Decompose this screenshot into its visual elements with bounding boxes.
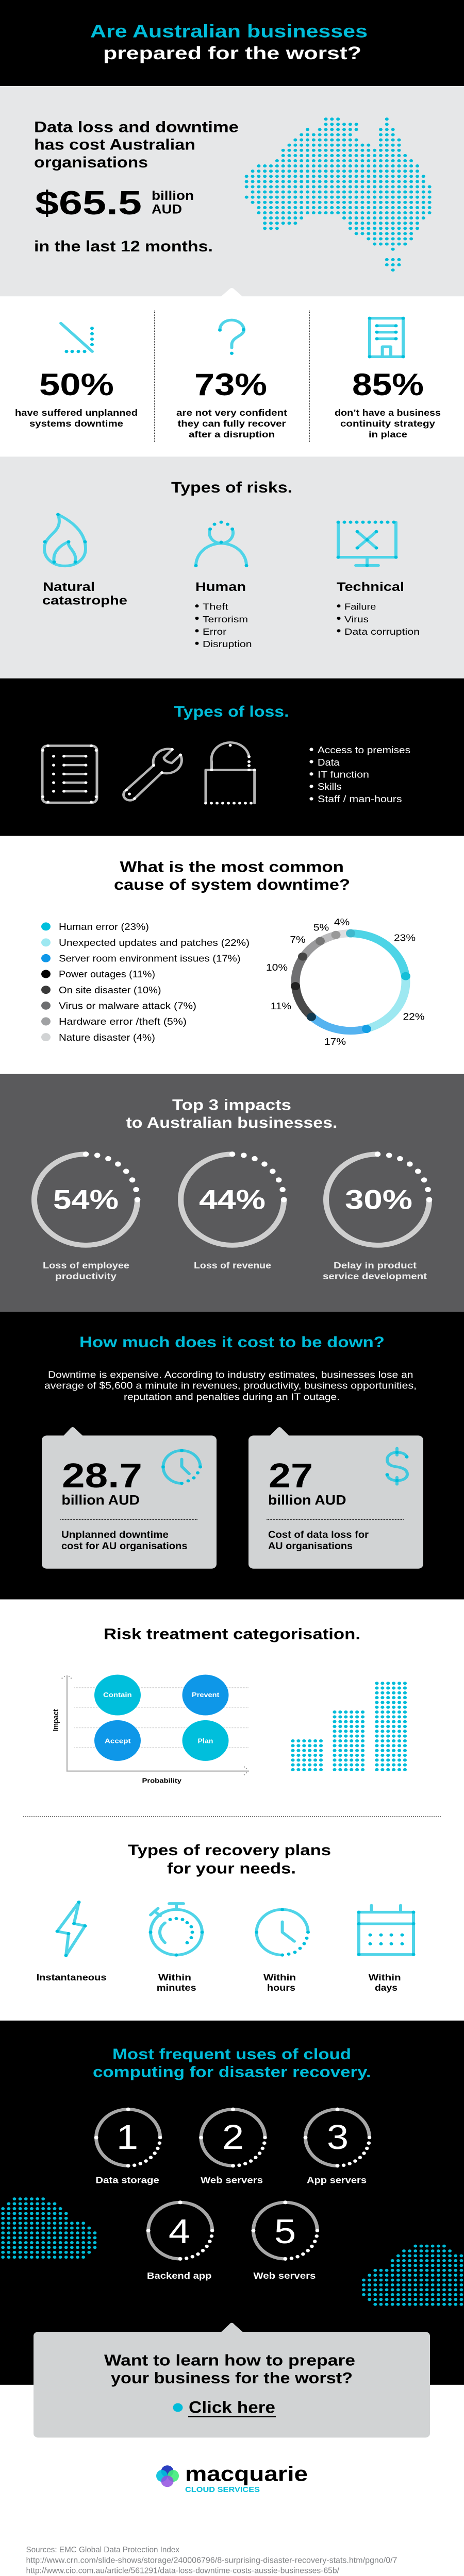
title: prepared for the worst? [103,43,361,63]
sources [26,2545,397,2575]
donut value labels: 10% [266,962,288,973]
panel: types of loss [0,679,464,836]
heading: recovery plans [128,1841,331,1877]
big number: $65.5 billion AUD: billion [152,188,194,203]
heading [126,1096,337,1131]
risk: natural catastrophe: Natural [43,580,95,594]
list: what is lost [309,745,410,805]
heading: Risk treatment categorisation. [104,1625,360,1642]
icon: monitor with cross [338,522,396,566]
intro text: organisations [34,154,148,171]
intro text [34,118,239,171]
sources: http://www.crn.com/slide-shows/storage/240006796/8-surprising-disaster-recovery-stats.htm/pgno/0/7 [26,2555,397,2565]
ring: 54% loss of employee productivity: Loss of employee [43,1260,129,1270]
panel: headline cost [0,86,464,296]
card: 27 billion AUD: 27 [269,1456,313,1495]
big number: $65.5 billion AUD [35,184,194,222]
heading: recovery plans: for your needs. [167,1859,296,1877]
sources: http://www.cio.com.au/article/561291/data-loss-downtime-costs-aussie-businesses-65b/ [26,2566,339,2575]
risk matrix chart: Accept [105,1737,131,1744]
legend: Power outages (11%) [59,969,155,980]
heading: computing for disaster recovery. [93,2063,371,2080]
risk matrix chart: Impact [51,1709,60,1731]
stat: 73%: after a disruption [189,429,275,439]
risk: human: Error [203,626,226,637]
heading: Top 3 impacts [172,1096,291,1113]
use 5: web servers: Web servers [253,2270,316,2281]
plan: within days: Within [369,1972,401,1982]
legend: Virus or malware attack (7%) [59,1001,196,1011]
icon: question mark [220,320,244,353]
logo: macquarie cloud services: macquarie [185,2463,308,2486]
use 4: backend app: Backend app [147,2270,211,2281]
panel: cloud uses [0,2021,464,2385]
list: what is lost: IT function [318,769,369,780]
stat: 85%: in place [369,429,407,439]
big number: $65.5 billion AUD: AUD [152,202,182,216]
list: what is lost: Access to premises [318,745,410,756]
plan: within minutes [151,1904,202,1993]
stat: 50%: 50% [39,367,114,402]
use 2: web servers: 2 [222,2118,244,2157]
ring: 54% loss of employee productivity: 54% [53,1184,119,1215]
risk: human: Terrorism [203,614,248,624]
risk: human: Human [195,580,246,594]
dotted bar chart [293,1683,405,1770]
title [90,21,368,63]
stat: 73%: 73% [194,367,267,402]
ring: 54% loss of employee productivity [34,1154,140,1281]
ring: 30% delay in product service development: 30% [345,1184,412,1215]
risk: technical: Data corruption [344,626,420,637]
donut value labels: 4% [334,917,350,928]
icon: downward trend arrow [61,323,92,351]
heading: What is the most common [120,858,344,875]
stat: 85%: don’t have a business [335,408,441,418]
stat: 85% [335,367,441,439]
risk matrix chart: Plan [198,1737,213,1744]
legend: Human error (23%) [59,922,149,933]
legend: Hardware error /theft (5%) [59,1016,187,1027]
use 5: web servers [251,2200,317,2281]
donut value labels: 7% [290,935,306,945]
list: what is lost: Data [318,757,340,768]
legend: On site disaster (10%) [59,985,161,995]
donut value labels: 23% [394,933,416,943]
heading [114,858,350,893]
risk: human: Theft [203,602,228,612]
panel: key statistics [0,288,464,456]
risk matrix chart: Contain [103,1691,132,1699]
risk: natural catastrophe: catastrophe [42,594,127,607]
list: what is lost: Staff / man-hours [318,794,402,805]
plan: within hours [257,1909,308,1993]
donut value labels: 5% [313,922,329,933]
ring: 44% loss of revenue: Loss of revenue [194,1260,271,1270]
panel: causes of downtime [0,836,464,1074]
use 4: backend app [146,2200,212,2281]
panel: cost of downtime [0,1312,464,1599]
legend [41,922,250,1043]
stat: 73%: are not very confident [176,408,288,418]
risk matrix chart: Prevent [192,1691,220,1699]
dotted map of Australia [246,119,429,270]
panel: types of risks [0,456,464,679]
paragraph [44,1370,417,1402]
donut value labels: 17% [324,1037,346,1047]
intro text: has cost Australian [34,136,195,153]
plan: instantaneous [37,1902,107,1982]
stat: 50% [15,367,138,429]
card: 27 billion AUD: Cost of data loss for [268,1529,369,1540]
logo: macquarie cloud services [156,2463,308,2494]
use 3: app servers: App servers [307,2175,367,2185]
risk matrix chart [51,1675,249,1784]
icon: flame [44,515,86,566]
panel: header [0,0,464,86]
donut value labels: 22% [403,1012,424,1022]
icon: person [196,522,246,566]
card: 27 billion AUD [248,1427,423,1569]
closing text: in the last 12 months. [34,238,213,255]
card: 28.7 billion AUD: 28.7 [62,1456,142,1495]
heading [93,2045,371,2080]
panel: top 3 impacts [0,1074,464,1312]
list: what is lost: Skills [318,782,342,792]
dotted cloud left [3,2199,95,2257]
risk: technical: Technical [337,580,404,594]
donut value labels [266,917,424,1047]
dotted cloud right [364,2246,461,2304]
use 2: web servers [199,2108,265,2185]
card: 28.7 billion AUD: cost for AU organisations [61,1540,188,1552]
stat: 50%: have suffered unplanned [15,408,138,418]
plan: instantaneous: Instantaneous [37,1972,107,1982]
ring: 44% loss of revenue [181,1154,287,1270]
risk: technical [337,580,420,637]
use 4: backend app: 4 [169,2212,190,2251]
call to action heading: Want to learn how to prepare [104,2351,355,2369]
stat: 73%: they can fully recover [178,418,286,429]
logo: macquarie cloud services: CLOUD SERVICES [185,2485,260,2494]
risk matrix chart: Probability [142,1776,181,1784]
donut chart [291,929,410,1033]
use 1: data storage: 1 [117,2118,138,2157]
risk: natural catastrophe [42,580,127,607]
icon: office building [370,318,403,357]
stat: 50%: systems downtime [29,418,123,429]
ring: 30% delay in product service development: Delay in product [334,1260,417,1270]
paragraph: average of $5,600 a minute in revenues, productivity, business opportunities, [44,1381,417,1391]
card: 27 billion AUD: billion AUD [268,1492,346,1507]
panel: call to action [34,2323,430,2437]
icon: clock [163,1450,201,1483]
click here link: Click here [189,2398,275,2417]
use 1: data storage: Data storage [95,2175,159,2185]
heading: cause of system downtime? [114,876,350,893]
plan: within days: days [375,1982,397,1993]
card: 28.7 billion AUD: Unplanned downtime [61,1529,169,1540]
heading: Types of loss. [174,703,289,720]
ring: 54% loss of employee productivity: productivity [55,1271,117,1281]
legend: Unexpected updates and patches (22%) [59,938,250,948]
title: Are Australian businesses [90,21,368,41]
ring: 44% loss of revenue: 44% [199,1184,266,1215]
heading: Most frequent uses of cloud [112,2045,351,2063]
use 5: web servers: 5 [274,2212,296,2251]
icon: wrench [124,749,181,800]
legend: Server room environment issues (17%) [59,954,241,964]
plan: within hours: Within [263,1972,296,1982]
stat: 85%: 85% [352,367,424,402]
intro text: Data loss and downtime [34,118,239,135]
heading: Types of risks. [171,479,292,496]
ring: 30% delay in product service development [323,1154,432,1281]
use 2: web servers: Web servers [201,2175,263,2185]
paragraph: reputation and penalties during an IT outage. [124,1392,340,1402]
plan: within minutes: Within [158,1972,191,1982]
call to action heading [104,2351,355,2387]
use 1: data storage [94,2108,160,2185]
plan: within hours: hours [267,1982,295,1993]
risk: technical: Failure [344,602,376,612]
donut value labels: 11% [271,1001,291,1012]
icon: padlock [206,742,255,803]
icon: document list [42,746,97,803]
use 3: app servers [303,2108,369,2185]
heading: to Australian businesses. [126,1114,338,1131]
risk: human [195,580,252,649]
stat: 73% [176,367,288,439]
ring: 30% delay in product service development: service development [323,1271,427,1281]
legend: Nature disaster (4%) [59,1032,155,1043]
plan: within days [359,1905,413,1993]
heading: recovery plans: Types of recovery plans [128,1841,331,1859]
card: 28.7 billion AUD: billion AUD [61,1492,140,1507]
heading: How much does it cost to be down? [79,1333,385,1350]
call to action heading: your business for the worst? [111,2369,353,2387]
panel: risk treatment and recovery plans [0,1599,464,2021]
plan: within minutes: minutes [157,1982,196,1993]
card: 28.7 billion AUD [42,1427,217,1569]
sources: Sources: EMC Global Data Protection Index [26,2545,179,2554]
stat: 85%: continuity strategy [340,418,436,429]
icon: dollar sign [387,1448,407,1484]
risk: human: Disruption [203,639,252,649]
paragraph: Downtime is expensive. According to industry estimates, businesses lose an [48,1370,413,1380]
card: 27 billion AUD: AU organisations [268,1540,353,1552]
big number: $65.5 billion AUD: $65.5 [35,184,142,222]
use 3: app servers: 3 [327,2118,349,2157]
risk: technical: Virus [344,614,369,624]
